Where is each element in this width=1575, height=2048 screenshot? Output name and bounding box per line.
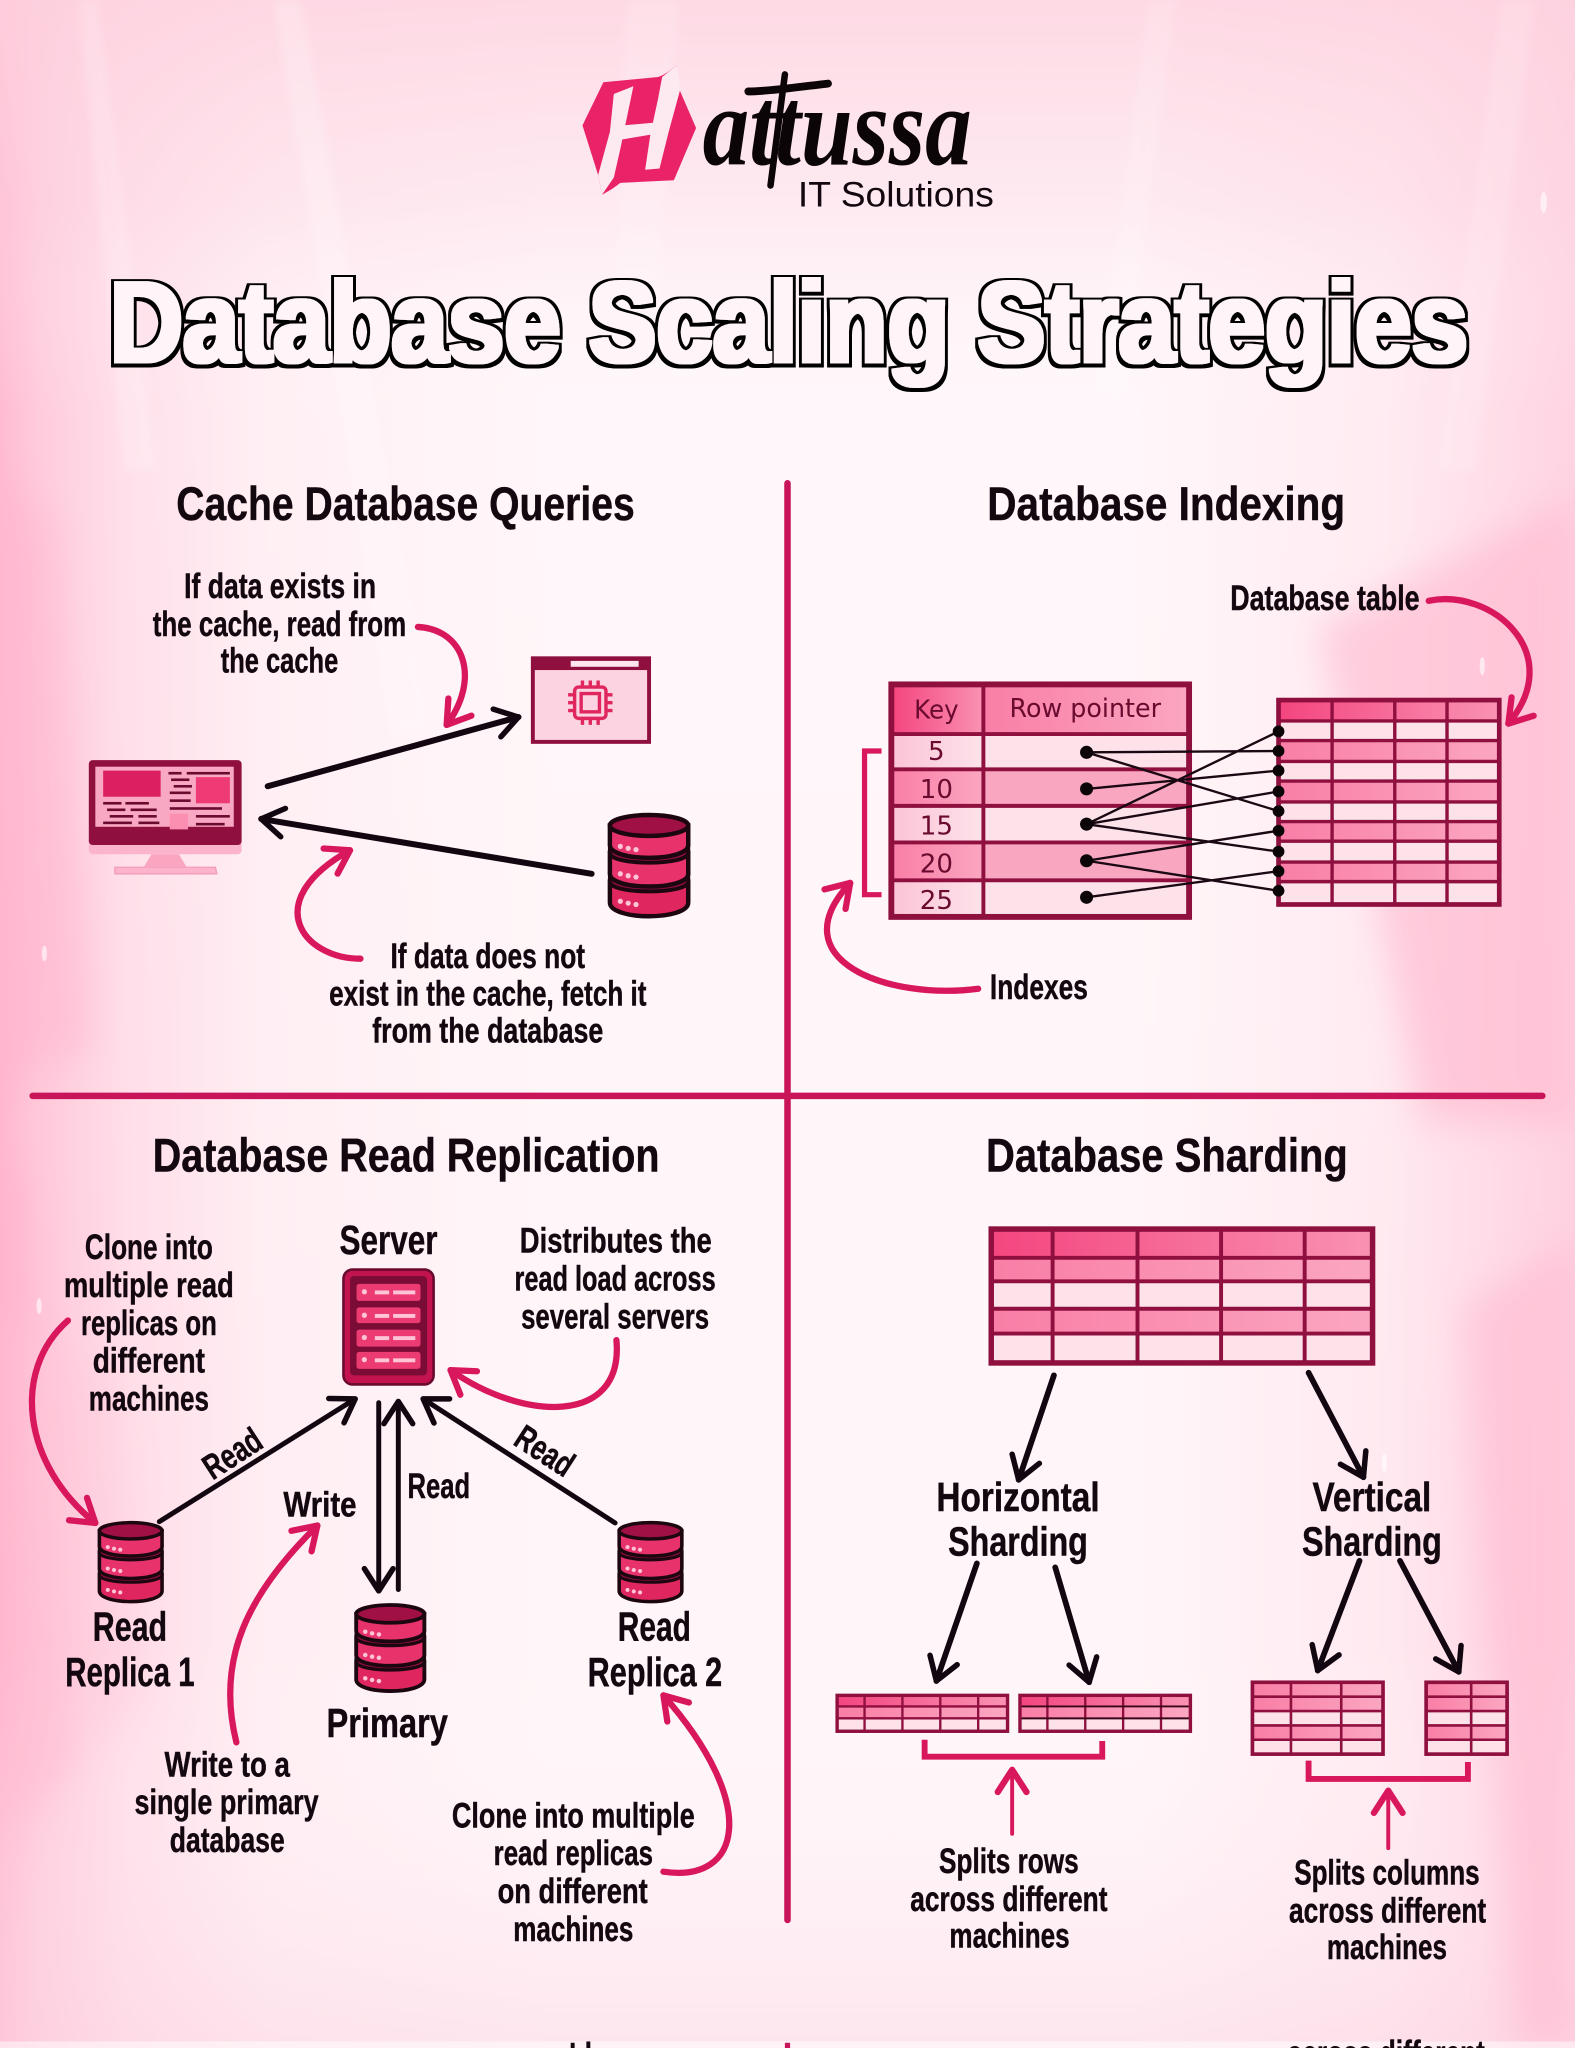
icon: primary database bbox=[356, 1605, 424, 1691]
arrow: callout to return path bbox=[298, 850, 360, 959]
callout: clone into replicas left: machines bbox=[89, 1380, 209, 1419]
callout: clone into replicas right: read replicas bbox=[494, 1834, 653, 1873]
callout: clone into replicas left: different bbox=[93, 1342, 205, 1381]
arrow: to horizontal bbox=[1019, 1375, 1054, 1480]
table: horizontal shard a bbox=[837, 1695, 1008, 1731]
table: vertical shard a bbox=[1252, 1682, 1383, 1754]
arrow: database to monitor bbox=[261, 819, 592, 874]
callout: distributes read load: several servers bbox=[521, 1297, 709, 1336]
arrow: clone to replica 1 bbox=[32, 1320, 95, 1523]
callout: distributes read load bbox=[515, 1222, 716, 1336]
icon: server bbox=[343, 1270, 434, 1384]
heading: sharding: Database Sharding bbox=[986, 1129, 1348, 1182]
callout: write to primary: Write to a bbox=[165, 1745, 290, 1784]
callout: splits columns: Splits columns bbox=[1294, 1854, 1480, 1893]
arrow: indexes bbox=[827, 883, 978, 991]
callout: splits rows: machines bbox=[949, 1916, 1070, 1955]
logo wordmark: attussa bbox=[703, 66, 972, 190]
callout: clone into replicas right: on different bbox=[498, 1872, 648, 1911]
table labels: 15 bbox=[920, 812, 953, 842]
bracket: horizontal shards bbox=[925, 1740, 1102, 1757]
table labels: 20 bbox=[920, 849, 953, 879]
table: vertical shard b bbox=[1426, 1682, 1507, 1754]
callout: data not in cache bbox=[329, 937, 647, 1050]
arrow: vertical shard a bbox=[1318, 1561, 1360, 1671]
callout: data exists in cache bbox=[153, 567, 406, 681]
arrow: splits columns bbox=[1387, 1791, 1390, 1848]
callout: clone into replicas left: multiple read bbox=[64, 1266, 234, 1305]
label: write: Write bbox=[283, 1485, 357, 1524]
table: database rows bbox=[1279, 700, 1499, 904]
logo: Hattussa IT Solutions bbox=[582, 65, 994, 214]
label: read replica 2 bbox=[588, 1603, 722, 1695]
arrow: distributes to server bbox=[451, 1340, 617, 1407]
arrow: read up bbox=[396, 1401, 400, 1590]
callout: clone into replicas left bbox=[64, 1228, 234, 1419]
heading: cache: Cache Database Queries bbox=[176, 477, 635, 530]
label: horizontal sharding: Sharding bbox=[948, 1519, 1088, 1565]
table: index bbox=[891, 684, 1189, 917]
callout: splits rows: Splits rows bbox=[939, 1842, 1079, 1881]
label: read left: Read bbox=[196, 1420, 270, 1487]
arrow: write callout bbox=[230, 1526, 317, 1742]
callout: write to primary: single primary bbox=[135, 1783, 319, 1822]
icon: read replica 1 database bbox=[99, 1523, 162, 1602]
arrow: to vertical bbox=[1309, 1373, 1363, 1477]
callout: write to primary bbox=[135, 1745, 319, 1860]
table labels: 25 bbox=[920, 886, 953, 916]
label: vertical sharding: Vertical bbox=[1312, 1474, 1431, 1520]
callout: data not in cache: from the database bbox=[372, 1011, 603, 1050]
label: read replica 2: Replica 2 bbox=[588, 1649, 722, 1695]
bottom cropped repeat strip bbox=[0, 2034, 1575, 2048]
callout: splits rows: across different bbox=[910, 1880, 1108, 1919]
label: indexes: Indexes bbox=[990, 968, 1088, 1007]
table: full table bbox=[991, 1229, 1373, 1363]
callout: distributes read load: read load across bbox=[515, 1259, 716, 1298]
callout: data not in cache: If data does not bbox=[390, 937, 585, 976]
arrow: horizontal shard b bbox=[1055, 1567, 1089, 1682]
icon: primary database bbox=[610, 815, 688, 916]
callout: data exists in cache: the cache bbox=[221, 642, 338, 681]
arrow: clone to replica 2 bbox=[663, 1695, 729, 1873]
icon: cache browser window bbox=[533, 658, 649, 742]
label: read replica 2: Read bbox=[618, 1603, 691, 1649]
table labels: Key bbox=[914, 695, 959, 725]
callout: clone into replicas right: Clone into multiple bbox=[452, 1796, 695, 1835]
callout: clone into replicas left: replicas on bbox=[81, 1304, 217, 1343]
arrow: replica 1 read bbox=[159, 1399, 355, 1522]
bracket: vertical shards bbox=[1309, 1761, 1468, 1779]
table: horizontal shard b bbox=[1020, 1695, 1190, 1731]
callout: data not in cache: exist in the cache, fetch it bbox=[329, 975, 647, 1014]
callout: data exists in cache: If data exists in bbox=[184, 567, 376, 606]
panel: cache database queries bbox=[89, 477, 688, 1050]
label: database table: Database table bbox=[1230, 579, 1420, 618]
arrow: splits rows bbox=[1011, 1770, 1014, 1834]
label: read right: Read bbox=[508, 1418, 581, 1485]
callout: splits rows bbox=[910, 1842, 1108, 1955]
quadrant dividers bbox=[33, 483, 1542, 1920]
table labels: 10 bbox=[920, 775, 953, 805]
arrow: horizontal shard a bbox=[936, 1563, 977, 1681]
arrow: monitor to cache bbox=[268, 717, 518, 786]
label: read replica 1: Read bbox=[93, 1603, 167, 1649]
callout: data exists in cache: the cache, read from bbox=[153, 605, 406, 644]
label: read middle: Read bbox=[407, 1467, 470, 1506]
label: server: Server bbox=[340, 1217, 438, 1263]
bracket: indexes bbox=[865, 751, 882, 895]
panel: database sharding bbox=[837, 1129, 1507, 1967]
logo mark: H badge bbox=[582, 65, 696, 195]
callout: distributes read load: Distributes the bbox=[520, 1222, 712, 1261]
heading: indexing: Database Indexing bbox=[987, 477, 1345, 530]
label: vertical sharding bbox=[1302, 1474, 1442, 1565]
callout: write to primary: database bbox=[170, 1821, 285, 1860]
label: horizontal sharding bbox=[936, 1474, 1100, 1565]
label: vertical sharding: Sharding bbox=[1302, 1519, 1442, 1565]
table labels: Row pointer bbox=[1010, 694, 1161, 724]
icon: read replica 2 database bbox=[619, 1523, 682, 1602]
callout: clone into replicas right: machines bbox=[513, 1910, 633, 1949]
callout: splits columns: across different bbox=[1289, 1892, 1486, 1931]
arrow: replica 2 read bbox=[423, 1399, 615, 1523]
heading: replication: Database Read Replication bbox=[153, 1129, 660, 1182]
panel: database indexing bbox=[827, 477, 1530, 1007]
callout: clone into replicas right bbox=[452, 1796, 695, 1949]
callout: splits columns: machines bbox=[1327, 1928, 1447, 1967]
arrow: callout to cache bbox=[418, 627, 465, 725]
callout: splits columns bbox=[1289, 1854, 1486, 1967]
label: primary: Primary bbox=[326, 1700, 448, 1746]
label: horizontal sharding: Horizontal bbox=[936, 1474, 1100, 1520]
label: read replica 1 bbox=[65, 1603, 195, 1695]
callout: clone into replicas left: Clone into bbox=[85, 1228, 213, 1267]
arrow: database table bbox=[1429, 599, 1530, 724]
logo tagline: IT Solutions bbox=[798, 175, 994, 214]
label: read replica 1: Replica 1 bbox=[65, 1649, 195, 1695]
pointer lines bbox=[1080, 726, 1284, 904]
arrow: write down bbox=[377, 1403, 381, 1591]
panel: database read replication bbox=[32, 1129, 729, 1949]
table labels bbox=[914, 694, 1161, 916]
table labels: 5 bbox=[928, 737, 945, 767]
arrow: vertical shard b bbox=[1400, 1561, 1459, 1672]
icon: monitor bbox=[89, 760, 242, 874]
